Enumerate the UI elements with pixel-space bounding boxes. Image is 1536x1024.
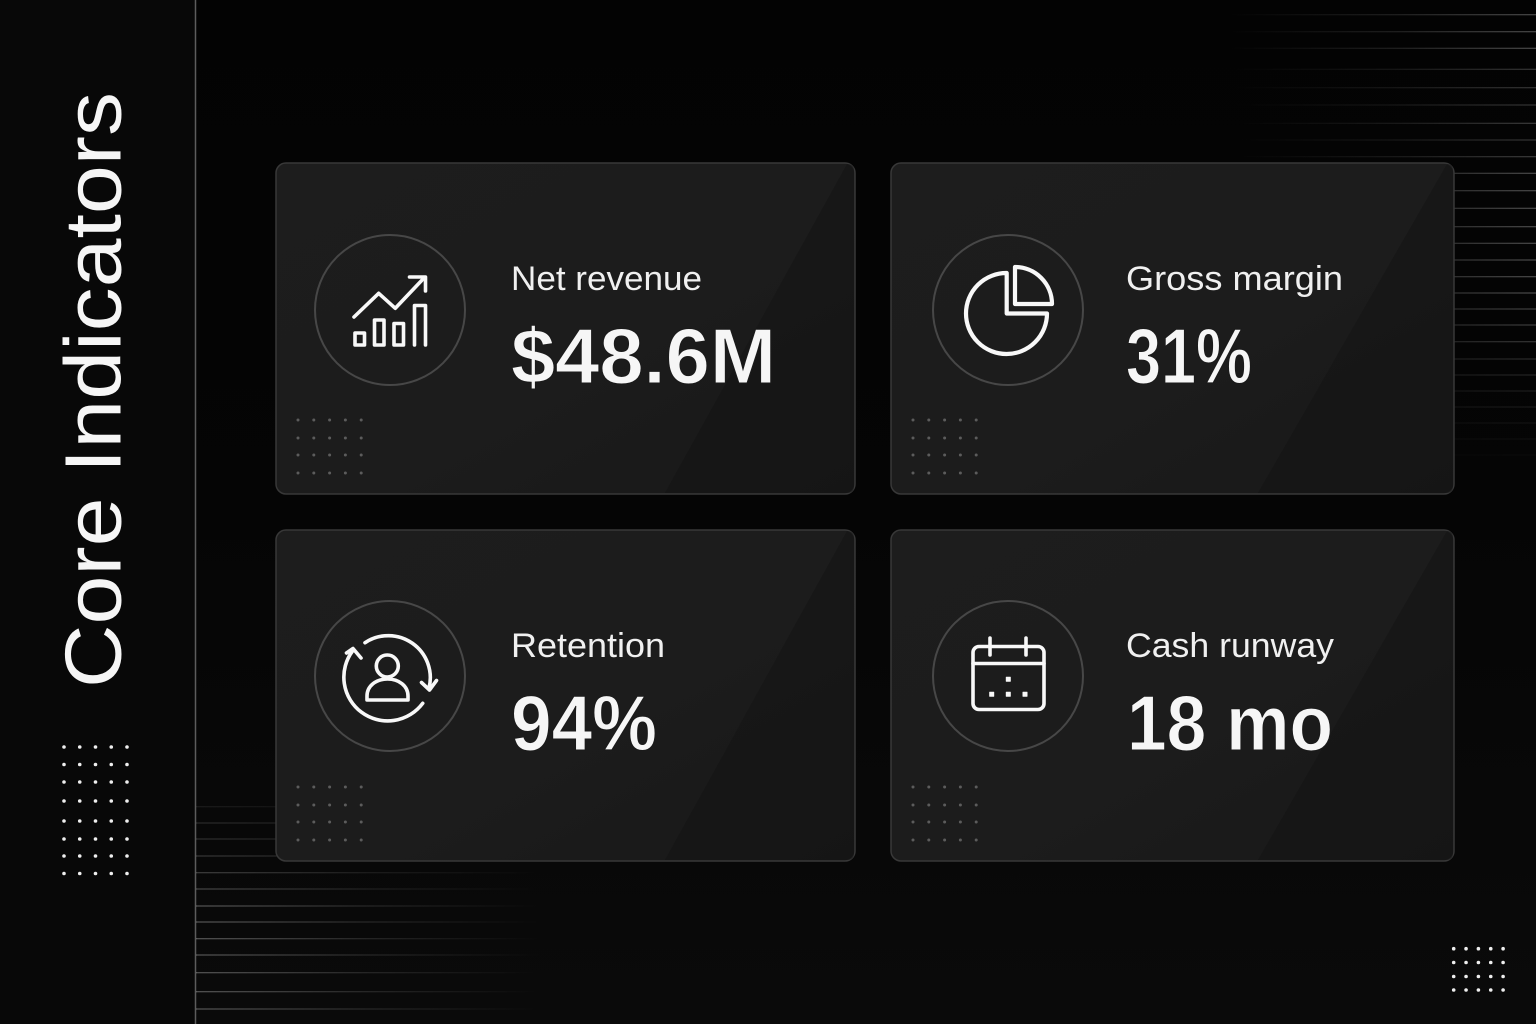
icon: calendar	[973, 638, 1044, 710]
corner dot grid	[1454, 949, 1504, 990]
icon ring	[933, 601, 1083, 751]
card background	[891, 530, 1454, 861]
dot grid	[298, 787, 362, 840]
sidebar dot grid	[64, 747, 128, 874]
card shade wedge	[1258, 164, 1453, 493]
dot grid	[913, 420, 977, 473]
card background	[891, 163, 1454, 494]
dot grid	[298, 420, 362, 473]
value: 18 mo	[1127, 679, 1333, 767]
icon ring	[315, 235, 465, 385]
label: Retention	[511, 627, 665, 665]
panel: net revenue	[276, 163, 855, 494]
icon ring	[315, 601, 465, 751]
value: 94%	[511, 679, 657, 767]
card background	[276, 163, 855, 494]
label: Gross margin	[1126, 260, 1343, 298]
background lines: top right	[1230, 15, 1536, 455]
icon: rising chart	[354, 277, 426, 345]
background lines: bottom left	[196, 807, 540, 1009]
label: Cash runway	[1126, 627, 1334, 665]
value: $48.6M	[511, 312, 776, 400]
panel: retention	[276, 530, 855, 861]
card shade wedge	[665, 531, 854, 860]
panel: gross margin	[891, 163, 1454, 494]
card shade wedge	[1258, 531, 1453, 860]
value: 31%	[1126, 312, 1252, 400]
title: Core Indicators	[48, 92, 138, 688]
label: Net revenue	[511, 260, 702, 298]
icon: person with cycle arrows	[344, 636, 436, 721]
icon ring	[933, 235, 1083, 385]
panel: cash runway	[891, 530, 1454, 861]
card shade wedge	[665, 164, 854, 493]
dot grid	[913, 787, 977, 840]
card background	[276, 530, 855, 861]
sidebar panel	[0, 0, 196, 1024]
icon: pie chart	[966, 267, 1052, 354]
